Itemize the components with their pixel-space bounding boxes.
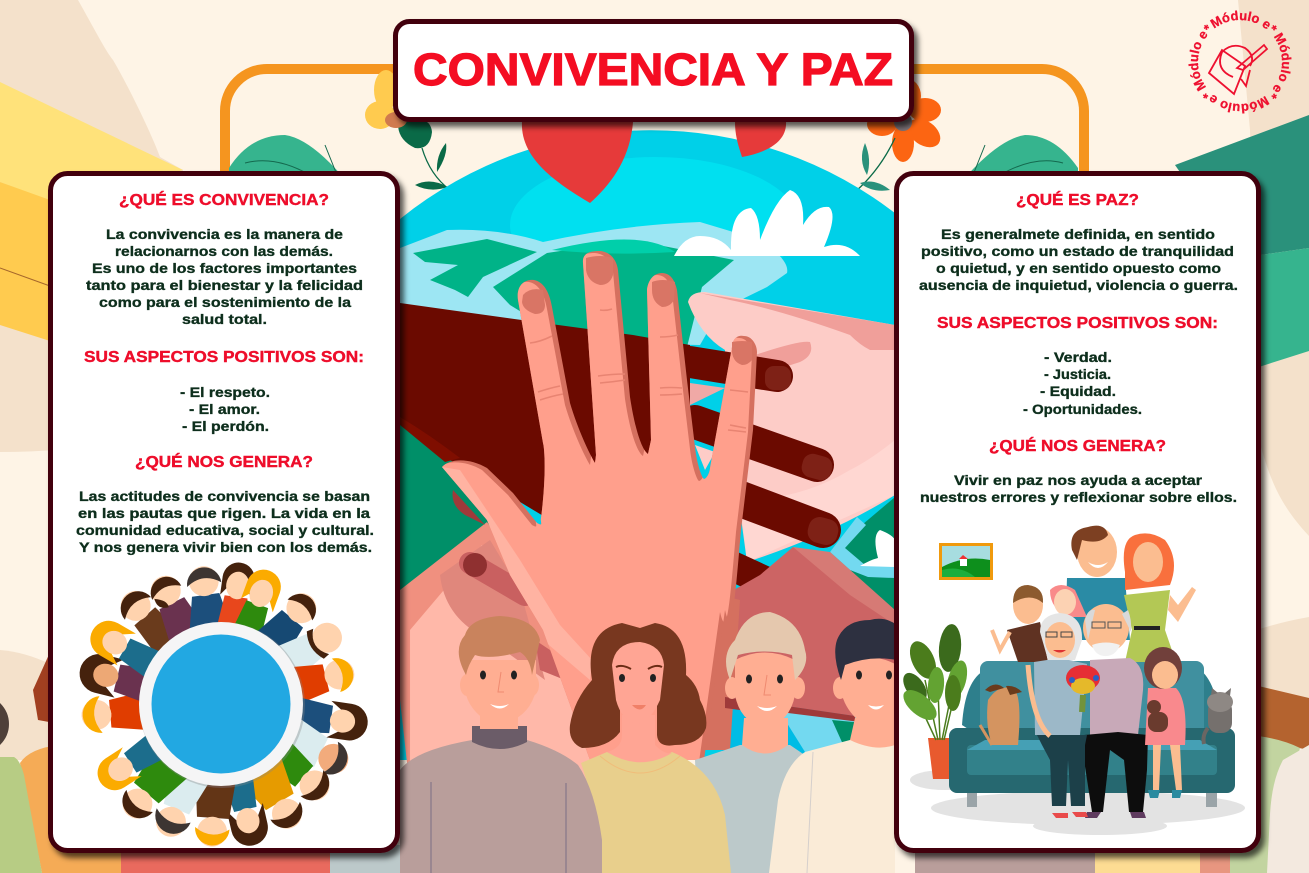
list: aspects: - El amor. xyxy=(189,401,260,417)
hand center xyxy=(437,251,757,762)
title box xyxy=(396,22,912,120)
baby xyxy=(1050,585,1087,617)
logo: Módulo e: * xyxy=(1272,25,1277,30)
heading: aspectos positivos: SUS ASPECTOS POSITIVOS SON: xyxy=(84,349,364,366)
plant xyxy=(898,623,971,779)
grandfather xyxy=(1083,604,1148,818)
text: genera: Y nos genera vivir bien con los demás. xyxy=(79,539,372,555)
person: woman with wavy hair xyxy=(570,623,731,873)
list: aspects paz xyxy=(1023,349,1142,417)
text: genera xyxy=(76,488,374,555)
heading: que es convivencia: ¿QUÉ ES CONVIVENCIA? xyxy=(119,192,329,209)
text: definition: La convivencia es la manera de xyxy=(106,226,343,242)
text: definition: tanto para el bienestar y la felicidad xyxy=(86,277,363,293)
logo: Módulo e xyxy=(1188,10,1292,114)
text: paz definition: Es generalmete definida, en sentido xyxy=(941,226,1215,242)
green leaves left xyxy=(229,135,372,300)
text: paz definition: ausencia de inquietud, violencia o guerra. xyxy=(919,277,1238,293)
text: paz definition xyxy=(919,226,1238,293)
logo: Módulo e: Módulo e xyxy=(1273,32,1292,92)
text: definition: Es uno de los factores importantes xyxy=(92,260,357,276)
logo: Módulo e: Módulo e xyxy=(1210,95,1270,114)
text: definition xyxy=(86,226,363,327)
illustration: family on sofa xyxy=(898,526,1245,835)
list: aspects paz: - Justicia. xyxy=(1044,366,1111,382)
heart right xyxy=(735,122,786,157)
central globe and hands xyxy=(400,122,900,790)
cat xyxy=(1204,688,1233,744)
illustration: circle of people xyxy=(75,560,370,849)
globe xyxy=(400,130,900,760)
title: CONVIVENCIA Y PAZ xyxy=(413,44,893,95)
panel: convivencia xyxy=(50,174,398,850)
text: genera: comunidad educativa, social y cultural. xyxy=(76,522,374,538)
cloud xyxy=(674,190,860,256)
dog xyxy=(980,684,1022,745)
text: genera paz xyxy=(920,472,1237,505)
text: genera: Las actitudes de convivencia se basan xyxy=(79,488,370,504)
list: aspects paz: - Oportunidades. xyxy=(1023,401,1142,417)
text: definition: relacionarnos con las demás. xyxy=(115,243,333,259)
logo: Módulo e: * xyxy=(1202,93,1208,99)
text: definition: salud total. xyxy=(182,311,267,327)
heading: que es paz: ¿QUÉ ES PAZ? xyxy=(1016,192,1139,209)
list: aspects paz: - Equidad. xyxy=(1040,383,1116,399)
person: turtleneck man xyxy=(400,616,602,873)
text: genera: en las pautas que rigen. La vida en la xyxy=(78,505,370,521)
pink hand xyxy=(400,490,895,790)
people group xyxy=(400,612,897,873)
person: light-haired man xyxy=(695,612,812,873)
heading: genera paz: ¿QUÉ NOS GENERA? xyxy=(989,438,1166,455)
flower right xyxy=(855,78,946,192)
text: genera paz: nuestros errores y reflexionar sobre ellos. xyxy=(920,489,1237,505)
boy xyxy=(992,585,1048,662)
green leaves right xyxy=(935,135,1078,300)
list: aspects: - El perdón. xyxy=(182,418,269,434)
light hand xyxy=(688,292,895,562)
logo: Módulo e: Módulo e xyxy=(1210,10,1270,29)
panel: paz xyxy=(896,174,1258,850)
man xyxy=(1065,526,1130,640)
flower left xyxy=(365,70,450,190)
orange frame xyxy=(225,69,1084,369)
heading: que nos genera: ¿QUÉ NOS GENERA? xyxy=(135,454,313,471)
list: aspects: - El respeto. xyxy=(180,384,270,400)
list: aspects paz: - Verdad. xyxy=(1044,349,1112,365)
logo: Módulo e: Módulo e xyxy=(1188,32,1208,92)
text: paz definition: o quietud, y en sentido opuesto como xyxy=(936,260,1221,276)
heading: aspectos paz: SUS ASPECTOS POSITIVOS SON: xyxy=(937,315,1218,332)
logo: Módulo e: * xyxy=(1204,24,1210,30)
girl xyxy=(1144,647,1186,798)
list: aspects xyxy=(180,384,270,434)
woman redhead xyxy=(1124,533,1196,662)
heart left xyxy=(522,122,633,203)
logo: Módulo e: * xyxy=(1272,94,1277,99)
person: dark-haired man xyxy=(769,619,897,873)
sofa xyxy=(949,661,1235,807)
bouquet xyxy=(1066,665,1100,712)
text: paz definition: positivo, como un estado de tranquilidad xyxy=(921,243,1234,259)
grandmother xyxy=(1028,613,1088,818)
text: genera paz: Vivir en paz nos ayuda a aceptar xyxy=(954,472,1203,488)
picture frame xyxy=(939,543,993,580)
dark hand xyxy=(400,303,841,604)
text: definition: como para el sostenimiento de la xyxy=(99,294,351,310)
